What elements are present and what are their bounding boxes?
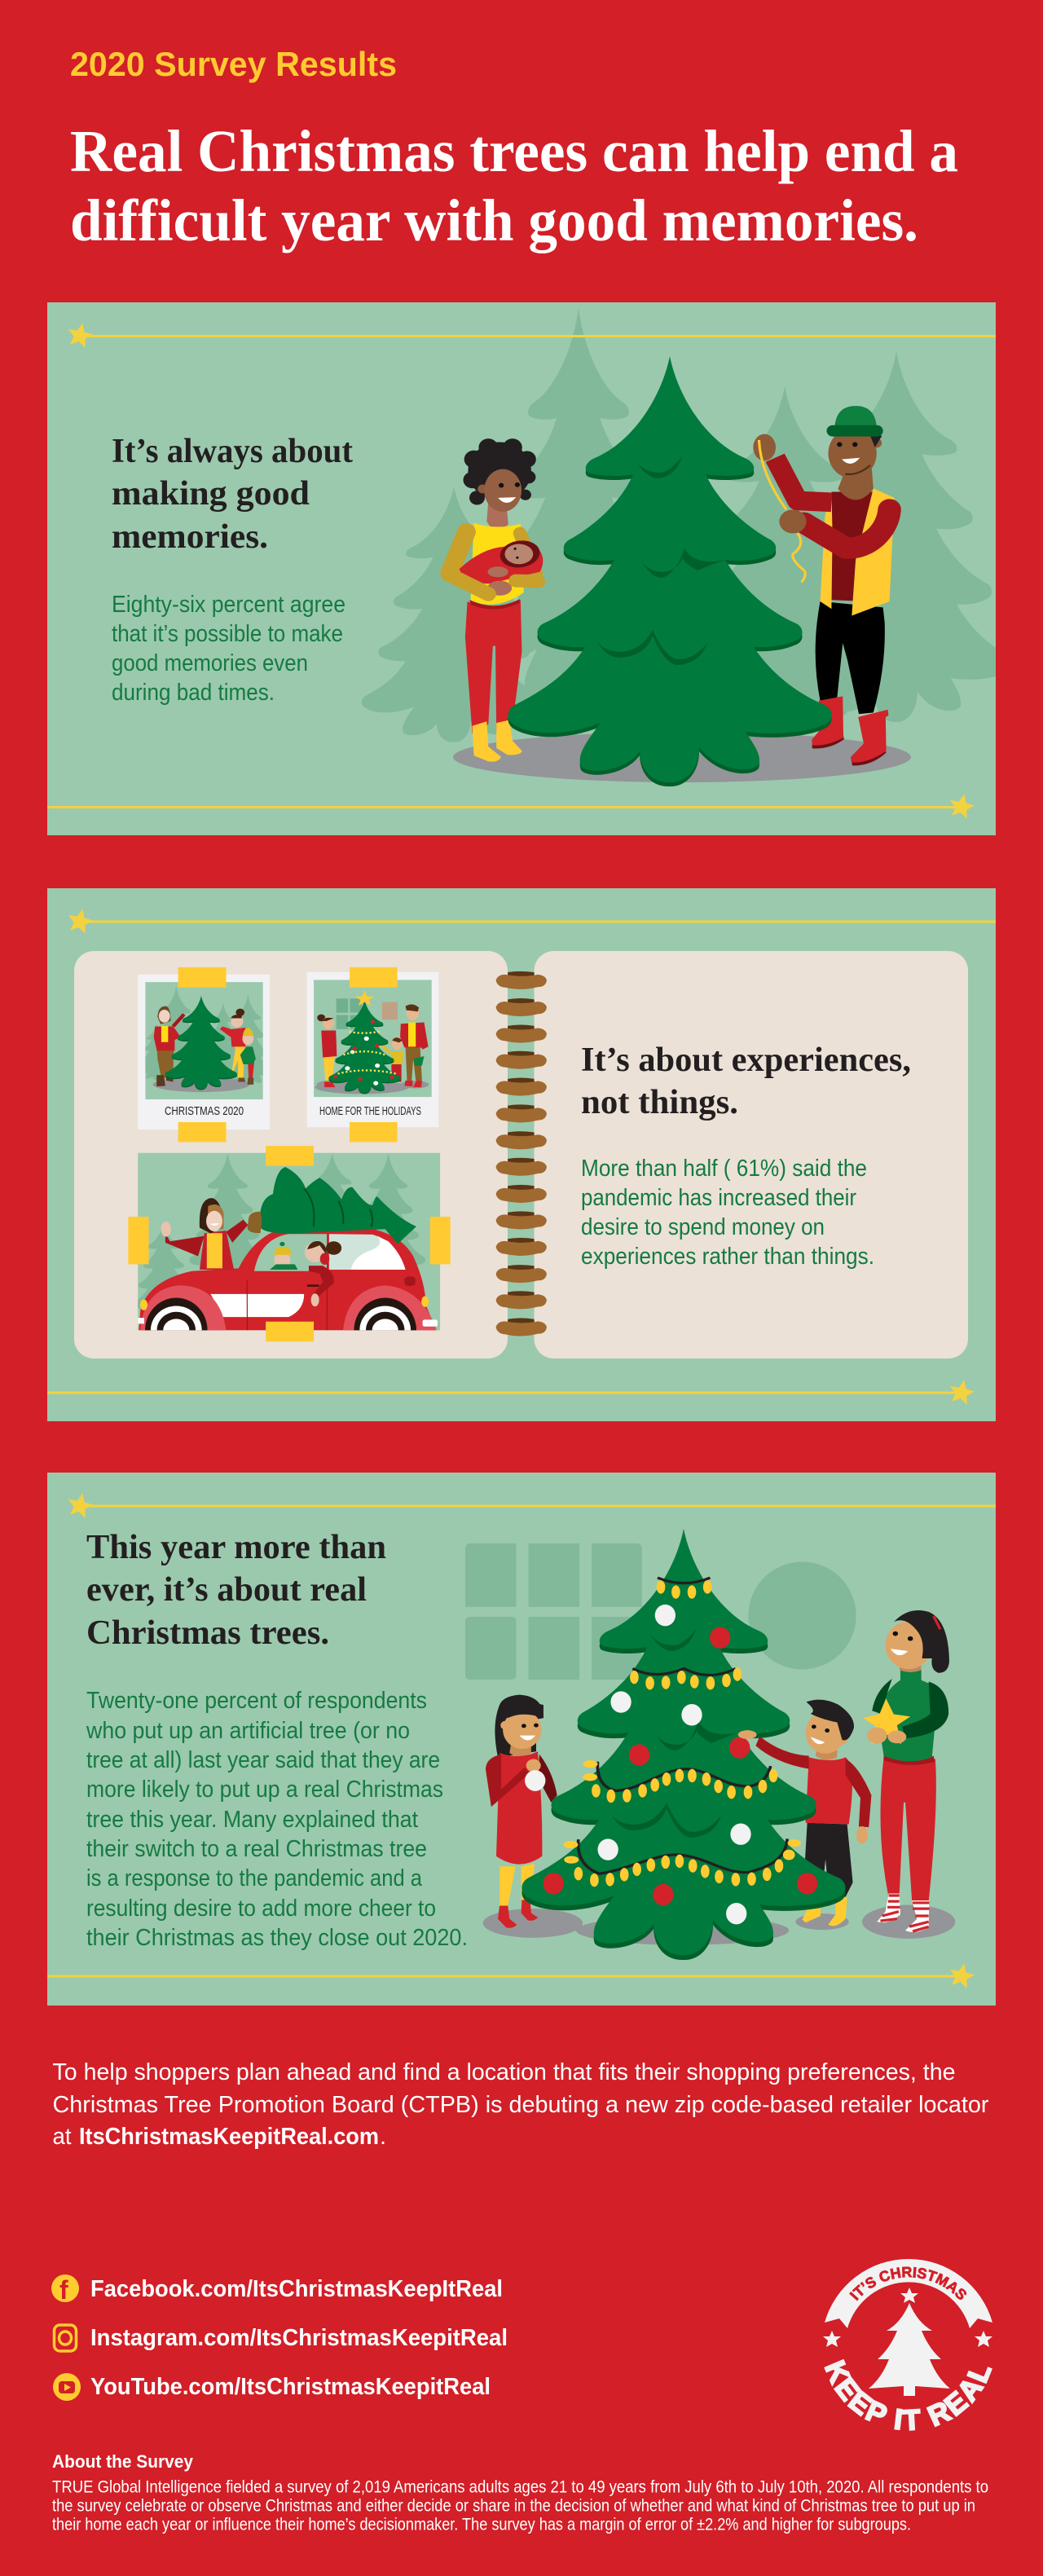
polaroid: Christmas 2020	[138, 975, 273, 1129]
caption: Christmas 2020: CHRISTMAS 2020	[165, 1104, 244, 1118]
top star rule	[65, 1491, 996, 1519]
title	[70, 118, 958, 253]
top star rule	[65, 320, 996, 349]
body text: their Christmas as they close out 2020.	[86, 1925, 468, 1951]
body text: tree this year. Many explained that	[86, 1807, 418, 1833]
about the survey	[52, 2451, 988, 2534]
polaroid: Home for the Holidays	[307, 972, 438, 1127]
icon: Facebook: f	[59, 2275, 68, 2305]
icon: Instagram	[54, 2325, 77, 2351]
panel: experiences	[47, 888, 996, 1421]
notebook right page	[535, 951, 968, 1358]
about text: their home each year or influence their home’s decisionmaker. The survey has a margin of error of ±2.2% and higher for subgroups.	[52, 2515, 911, 2534]
heading: ever, it’s about real	[86, 1571, 367, 1609]
closing paragraph: Christmas Tree Promotion Board (CTPB) is debuting a new zip code-based retailer locator	[52, 2092, 989, 2118]
social links	[51, 2274, 508, 2401]
YouTube link: YouTube.com/ItsChristmasKeepitReal	[90, 2374, 491, 2400]
closing paragraph: at	[52, 2124, 72, 2150]
body text: experiences rather than things.	[581, 1244, 874, 1270]
closing paragraph: .	[380, 2124, 386, 2150]
bottom star rule	[47, 791, 976, 820]
heading	[581, 1041, 911, 1121]
kicker: 2020 Survey Results: 2020 Survey Results	[70, 45, 397, 83]
logo: It's Christmas Keep It Real: KEEP IT REAL	[824, 2358, 992, 2431]
ornaments and string lights	[544, 1578, 817, 1924]
floor shadows	[483, 1904, 955, 1945]
heading: This year more than	[86, 1529, 386, 1566]
background trees	[362, 308, 1013, 742]
body text: their switch to a real Christmas tree	[86, 1836, 427, 1862]
decorated Christmas tree	[522, 1529, 846, 1960]
bottom star rule	[47, 1377, 976, 1406]
closing paragraph: To help shoppers plan ahead and find a location that fits their shopping preferences, the	[52, 2059, 955, 2085]
body text: desire to spend money on	[581, 1214, 825, 1240]
photo: family with car	[138, 1152, 440, 1330]
closing paragraph	[52, 2059, 989, 2150]
heading	[86, 1529, 386, 1652]
body text: during bad times.	[112, 680, 275, 706]
top star rule	[65, 906, 996, 935]
window and wall	[465, 1543, 856, 1680]
logo: It's Christmas Keep It Real	[823, 2259, 992, 2431]
spiral binding	[496, 971, 547, 1336]
woman holding baby	[450, 438, 543, 762]
body text: Eighty-six percent agree	[112, 592, 345, 618]
about heading: About the Survey	[52, 2451, 194, 2472]
icon: YouTube	[53, 2373, 81, 2401]
caption: Home for the Holidays: HOME FOR THE HOLIDAYS	[319, 1104, 421, 1118]
title: Real Christmas trees can help end a	[70, 118, 958, 184]
body text	[86, 1688, 468, 1951]
body text: who put up an artificial tree (or no	[86, 1718, 410, 1744]
heading	[112, 433, 353, 556]
man with garland	[753, 406, 895, 765]
body text: More than half ( 61%) said the	[581, 1156, 867, 1182]
body text: tree at all) last year said that they are	[86, 1747, 440, 1773]
about text	[52, 2477, 988, 2534]
body text	[112, 592, 345, 706]
panel: real Christmas trees	[47, 1473, 996, 2006]
panel: good memories	[47, 302, 1013, 835]
heading: It’s about experiences,	[581, 1041, 911, 1079]
bottom star rule	[47, 1961, 976, 1989]
body text: is a response to the pandemic and a	[86, 1865, 423, 1891]
body text: pandemic has increased their	[581, 1185, 856, 1211]
family decorating tree scene	[465, 1543, 955, 1945]
heading: making good	[112, 475, 310, 513]
body text: that it’s possible to make	[112, 621, 343, 647]
icon: Facebook	[51, 2274, 79, 2305]
washi tape	[128, 967, 451, 1341]
heading: not things.	[581, 1084, 738, 1121]
large Christmas tree	[508, 356, 832, 786]
heading: Christmas trees.	[86, 1614, 329, 1652]
heading: It’s always about	[112, 433, 353, 470]
logo: It's Christmas Keep It Real: IT’S CHRISTMAS	[849, 2266, 966, 2301]
closing paragraph: ItsChristmasKeepitReal.com	[79, 2124, 379, 2150]
Instagram link: Instagram.com/ItsChristmasKeepitReal	[90, 2325, 508, 2351]
title: difficult year with good memories.	[70, 187, 918, 253]
heading: memories.	[112, 518, 268, 556]
body text: resulting desire to add more cheer to	[86, 1896, 436, 1922]
boy arm reaching to tree	[738, 1730, 809, 1769]
body text: more likely to put up a real Christmas	[86, 1777, 443, 1803]
mother holding star	[863, 1610, 949, 1932]
girl	[486, 1695, 557, 1928]
body text	[581, 1156, 874, 1270]
Facebook link: Facebook.com/ItsChristmasKeepItReal	[90, 2276, 503, 2302]
ground shadow	[453, 732, 911, 782]
notebook left page	[74, 951, 508, 1358]
body text: Twenty-one percent of respondents	[86, 1688, 427, 1714]
body text: good memories even	[112, 650, 308, 676]
boy body	[803, 1700, 871, 1926]
photo collage	[128, 967, 547, 1363]
